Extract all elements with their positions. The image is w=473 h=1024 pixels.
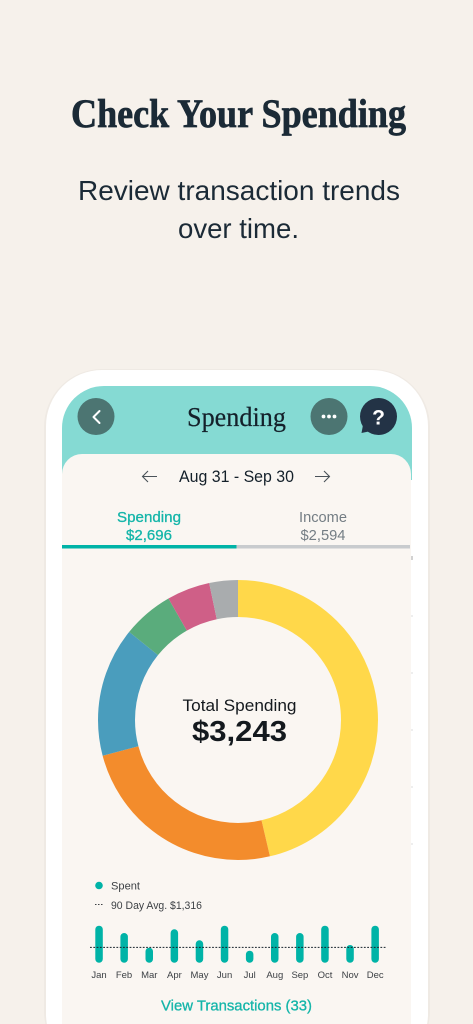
subtitle: over time. bbox=[178, 213, 299, 244]
month labels: Jan bbox=[91, 970, 107, 981]
tab: spending: $2,696 bbox=[126, 527, 172, 544]
bar chart: monthly spending bbox=[90, 926, 386, 981]
month labels: Apr bbox=[167, 970, 182, 981]
subtitle bbox=[78, 175, 400, 244]
legend: spent bbox=[95, 880, 140, 892]
panel: content card bbox=[62, 454, 411, 1024]
icon: next arrow bbox=[315, 471, 330, 482]
donut chart bbox=[116, 598, 360, 842]
month labels: Jun bbox=[217, 970, 232, 981]
month labels: Feb bbox=[116, 970, 132, 981]
donut center label: $3,243 bbox=[192, 716, 287, 748]
donut center label bbox=[182, 696, 296, 748]
icon: help speech bubble bbox=[360, 398, 397, 435]
tab: income bbox=[299, 509, 347, 544]
app header bbox=[62, 386, 412, 480]
month labels bbox=[91, 970, 384, 981]
icon: help speech bubble: ? bbox=[372, 406, 385, 430]
month labels: Aug bbox=[266, 970, 283, 981]
month labels: Jul bbox=[244, 970, 256, 981]
month labels: Oct bbox=[318, 970, 333, 981]
phone frame bbox=[46, 370, 428, 1024]
icon: previous arrow bbox=[142, 471, 157, 482]
month labels: Sep bbox=[291, 970, 308, 981]
legend: 90 day average: 90 Day Avg. $1,316 bbox=[111, 900, 202, 912]
legend: spent: Spent bbox=[111, 880, 140, 892]
date range: Aug 31 - Sep 30 bbox=[179, 467, 294, 486]
link: view transactions: View Transactions (33) bbox=[161, 998, 312, 1014]
title: Check Your Spending bbox=[71, 91, 406, 136]
tab: spending: Spending bbox=[117, 509, 181, 526]
icon: more options button bbox=[310, 398, 348, 435]
month labels: Mar bbox=[141, 970, 157, 981]
tab: income: Income bbox=[299, 509, 347, 526]
icon: back button bbox=[78, 398, 114, 435]
panel: phone mockup bbox=[44, 369, 430, 1024]
donut center label: Total Spending bbox=[182, 696, 296, 715]
month labels: Nov bbox=[342, 970, 359, 981]
date selector bbox=[142, 467, 330, 486]
month labels: May bbox=[191, 970, 209, 981]
screen title: Spending bbox=[187, 402, 286, 432]
tab indicator bbox=[62, 545, 410, 548]
tab: spending bbox=[117, 509, 181, 544]
tab: income: $2,594 bbox=[300, 527, 346, 544]
subtitle: Review transaction trends bbox=[78, 175, 400, 206]
phone frame shadow bbox=[44, 369, 430, 1024]
month labels: Dec bbox=[367, 970, 384, 981]
